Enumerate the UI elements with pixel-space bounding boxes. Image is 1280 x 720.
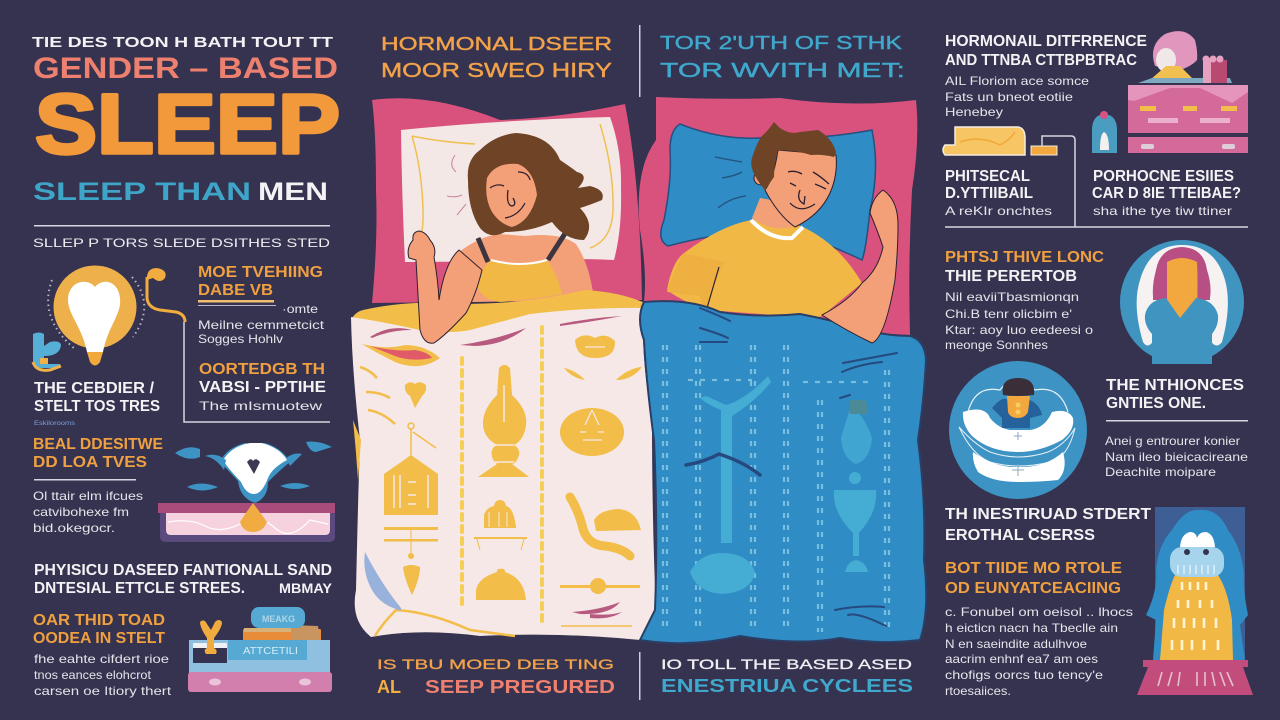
text block: morning: Sogges Hohlv [198, 332, 283, 346]
text block: real: catvibohexe fm [33, 505, 129, 519]
text block: real: bid.okegocr. [33, 521, 115, 535]
text block: physical: DNTESIAL ETTCLE STREES. [34, 580, 245, 597]
text block: physical long: meonge Sonnhes [945, 338, 1048, 352]
icon: dresser with figure and bottle [1092, 31, 1248, 153]
heading: center right: TOR WVITH MET: [660, 60, 905, 82]
title block: MEN [258, 178, 328, 206]
heading: hormonal center left: MOOR SWEO HIRY [381, 60, 612, 82]
text block: physical: PHYISICU DASEED FANTIONALL SAND [34, 562, 332, 579]
text block: physical long: Chi.B tenr olicbim e' [945, 307, 1072, 321]
text block: physical distribution [945, 168, 1052, 218]
text block: morning: ·omte [282, 302, 318, 316]
text block: hormone: sha ithe tye tiw ttiner [1093, 204, 1232, 218]
text block: real: DD LOA TVES [33, 454, 147, 471]
icon: glowing bulb with connector [33, 266, 330, 422]
text block: menstrual: chofigs oorcs tuo tency'e [945, 668, 1103, 682]
text block: physical long: Ktar: aoy luo eedeesi o [945, 323, 1093, 337]
icon: stack of books: MEAKG [262, 614, 295, 624]
caption: bottom left: AL [377, 677, 401, 697]
title block: TIE DES TOON H BATH TOUT TT [32, 34, 333, 51]
text block: menstrual [945, 506, 1151, 698]
text block: menstrual: h eicticn nacn ha Tbeclle ain [945, 621, 1118, 635]
text block: menstrual: aacrim enhnf ea7 am oes [945, 652, 1098, 666]
text block: influences: GNTIES ONE. [1106, 395, 1206, 412]
text block: menstrual: BOT TIIDE MO RTOLE [945, 560, 1122, 577]
text block: morning: VABSI - PPTIHE [199, 379, 326, 396]
text block: physical: OODEA IN STELT [33, 630, 165, 647]
text block: gender label: THE CEBDIER / [34, 380, 155, 397]
text block: hormone: CAR D 8IE TTEIBAE? [1092, 185, 1241, 202]
text block: morning: OORTEDGB TH [199, 361, 325, 378]
text block: hormonal difference: Fats un bneot eotiie [945, 90, 1073, 104]
text block: physical: OAR THID TOAD [33, 612, 165, 629]
title block: SLEEP THAN [33, 178, 251, 206]
icon: stack of books: ATTCETILI [243, 646, 298, 657]
text block: gender label: Eskilorooms [34, 421, 75, 427]
icon: pelvis on tray [158, 442, 335, 542]
figure: woman body [459, 133, 603, 302]
text block: morning: The mIsmuotew [199, 399, 322, 413]
icons on left blanket [384, 335, 642, 600]
text block: hormonal difference: AND TTNBA CTTBPBTRAC [945, 52, 1137, 69]
text block: morning: Meilne cemmetcict [198, 318, 325, 332]
text block: hormonal difference [945, 33, 1147, 119]
headboard: right pink [639, 97, 917, 335]
text block: hormonal difference: Henebey [945, 105, 1003, 119]
dotted grid [663, 345, 889, 632]
text block: physical: MBMAY [279, 580, 333, 596]
text block: influences: Deachite moipare [1105, 465, 1216, 479]
arm: man [822, 190, 898, 343]
figure: man body [667, 122, 862, 320]
text block: morning [198, 264, 326, 413]
text block: menstrual: c. Fonubel om oeisol .. lhocs [945, 605, 1133, 619]
text block: physical long: PHTSJ THIVE LONC [945, 249, 1104, 266]
text block: menstrual: OD EUNYATCEACIING [945, 580, 1121, 597]
pillow: woman [401, 117, 621, 262]
pillow: man [661, 124, 876, 260]
blanket: left [351, 290, 656, 640]
heading: center right: TOR 2'UTH OF STHK [660, 33, 902, 53]
text block: menstrual: rtoesaiices. [945, 684, 1011, 698]
text block: hormone [1092, 168, 1241, 218]
text block: gender label [34, 380, 160, 427]
white marks on yellow icons [580, 347, 605, 440]
text block: hormonal difference: HORMONAIL DITFRRENCE [945, 33, 1147, 50]
text block: morning: DABE VB [198, 282, 273, 299]
headboard: left pink [372, 98, 642, 303]
text block: morning: MOE TVEHIING [198, 264, 323, 281]
text block: influences: Nam ileo bieicacireane [1105, 450, 1248, 464]
text block: real: BEAL DDESITWE [33, 436, 163, 453]
text block: physical: tnos eances elohcrot [34, 668, 152, 682]
title block: SLLEP P TORS SLEDE DSITHES STED [33, 236, 330, 250]
dark chevrons [686, 308, 897, 626]
heading: hormonal center left [381, 34, 612, 82]
arm: woman [408, 231, 482, 343]
illustration: bed with sleepers [351, 97, 926, 643]
text block: real [33, 436, 163, 535]
text block: gender label: STELT TOS TRES [34, 398, 160, 415]
heading: hormonal center left: HORMONAL DSEER [381, 34, 612, 54]
text block: influences [1105, 377, 1248, 479]
face [486, 164, 537, 227]
text block: physical [33, 562, 333, 698]
icon: woman portrait circle [1120, 240, 1244, 364]
text block: physical: carsen oe Itiory thert [34, 684, 172, 698]
icon: butter with connector [943, 127, 1248, 227]
icon: sleeper circle [949, 361, 1087, 499]
icon: figure panel with tower [1137, 507, 1253, 695]
text block: physical distribution: PHITSECAL [945, 168, 1030, 185]
text block: physical long: THIE PERERTOB [945, 268, 1077, 285]
caption: bottom right: IO TOLL THE BASED ASED [661, 656, 912, 672]
text block: physical long [945, 249, 1104, 352]
text block: influences: THE NTHIONCES [1106, 377, 1244, 394]
text block: menstrual: N en saeindite adulhvoe [945, 637, 1087, 651]
text block: physical distribution: A reKIr onchtes [945, 204, 1052, 218]
text block: physical distribution: D.YTTIIBAIL [945, 185, 1033, 202]
caption: bottom left [377, 656, 615, 697]
text block: physical long: Nil eaviiTbasmionqn [945, 290, 1079, 304]
text block: menstrual: TH INESTIRUAD STDERT [945, 506, 1151, 523]
hair [468, 133, 603, 240]
caption: bottom right: ENESTRIUA CYCLEES [661, 676, 913, 696]
heading: center right [660, 33, 905, 82]
blue pendant on blanket [364, 552, 401, 610]
title block [32, 34, 340, 250]
teal figures [690, 376, 876, 594]
text block: hormonal difference: AIL Floriom ace somce [945, 74, 1089, 88]
caption: bottom right [661, 656, 913, 696]
text block: hormone: PORHOCNE ESIIES [1093, 168, 1234, 185]
text block: influences: Anei g entrourer konier [1105, 434, 1240, 448]
title block: GENDER – BASED [33, 52, 338, 85]
icon: stack of books [188, 607, 332, 692]
caption: bottom left: SEEP PREGURED [425, 677, 615, 697]
caption: bottom left: IS TBU MOED DEB TING [377, 656, 614, 672]
title block: SLEEP [35, 77, 340, 171]
blanket strokes [360, 316, 632, 626]
blanket: right [640, 301, 926, 643]
dotted dividers [462, 327, 542, 622]
text block: menstrual: EROTHAL CSERSS [945, 527, 1095, 544]
text block: real: Ol ttair elm ifcues [33, 489, 143, 503]
text block: physical: fhe eahte cifdert rioe [34, 652, 169, 666]
